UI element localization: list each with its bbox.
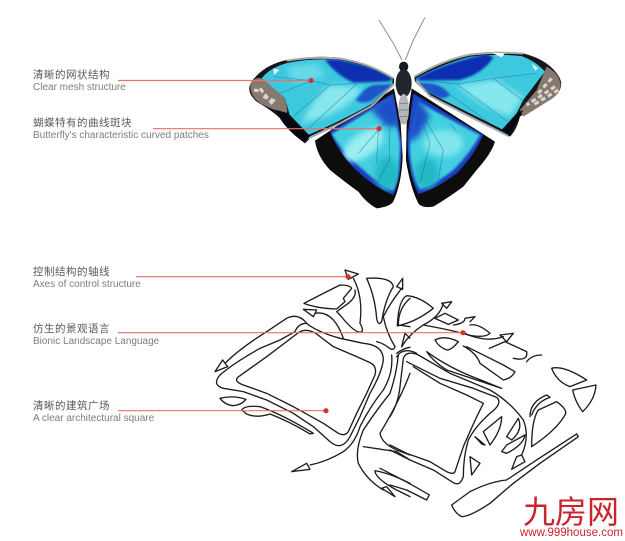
label: axes of control structure	[33, 266, 141, 290]
callout line: landscape language	[118, 330, 466, 335]
callout line: architectural square	[118, 408, 329, 413]
callout line: control axes	[136, 274, 351, 279]
antennae	[379, 17, 425, 60]
left hindwing	[315, 88, 403, 208]
watermark logo: www.999house.com	[520, 527, 623, 539]
right hindwing	[406, 88, 495, 207]
left forewing	[249, 57, 394, 143]
label: bionic landscape language: Bionic Landscape Language	[33, 336, 159, 346]
body	[396, 62, 412, 125]
label: clear mesh structure: 清晰的网状结构	[33, 69, 110, 81]
callout line: curved patches	[153, 126, 382, 131]
label: clear architectural square: A clear architectural square	[33, 412, 154, 424]
label: clear architectural square: 清晰的建筑广场	[33, 400, 110, 412]
label: curved patches: Butterfly's characteristic curved patches	[33, 130, 209, 141]
callout line: mesh structure	[118, 78, 314, 83]
label: clear mesh structure	[33, 69, 126, 93]
right forewing	[414, 52, 561, 137]
label: axes of control structure: 控制结构的轴线	[33, 266, 110, 278]
butterfly illustration	[249, 17, 561, 208]
label: bionic landscape language	[33, 322, 159, 346]
watermark logo: 九房网	[523, 487, 619, 533]
label: bionic landscape language: 仿生的景观语言	[33, 322, 110, 334]
sketch: left plaza and trunk	[215, 270, 410, 497]
label: clear architectural square	[33, 400, 154, 424]
sketch: right plaza and patches	[380, 296, 596, 517]
label: clear mesh structure: Clear mesh structure	[33, 82, 126, 93]
label: axes of control structure: Axes of control structure	[33, 278, 141, 290]
label: curved patches: 蝴蝶特有的曲线斑块	[33, 117, 132, 129]
label: curved patches	[33, 117, 209, 141]
